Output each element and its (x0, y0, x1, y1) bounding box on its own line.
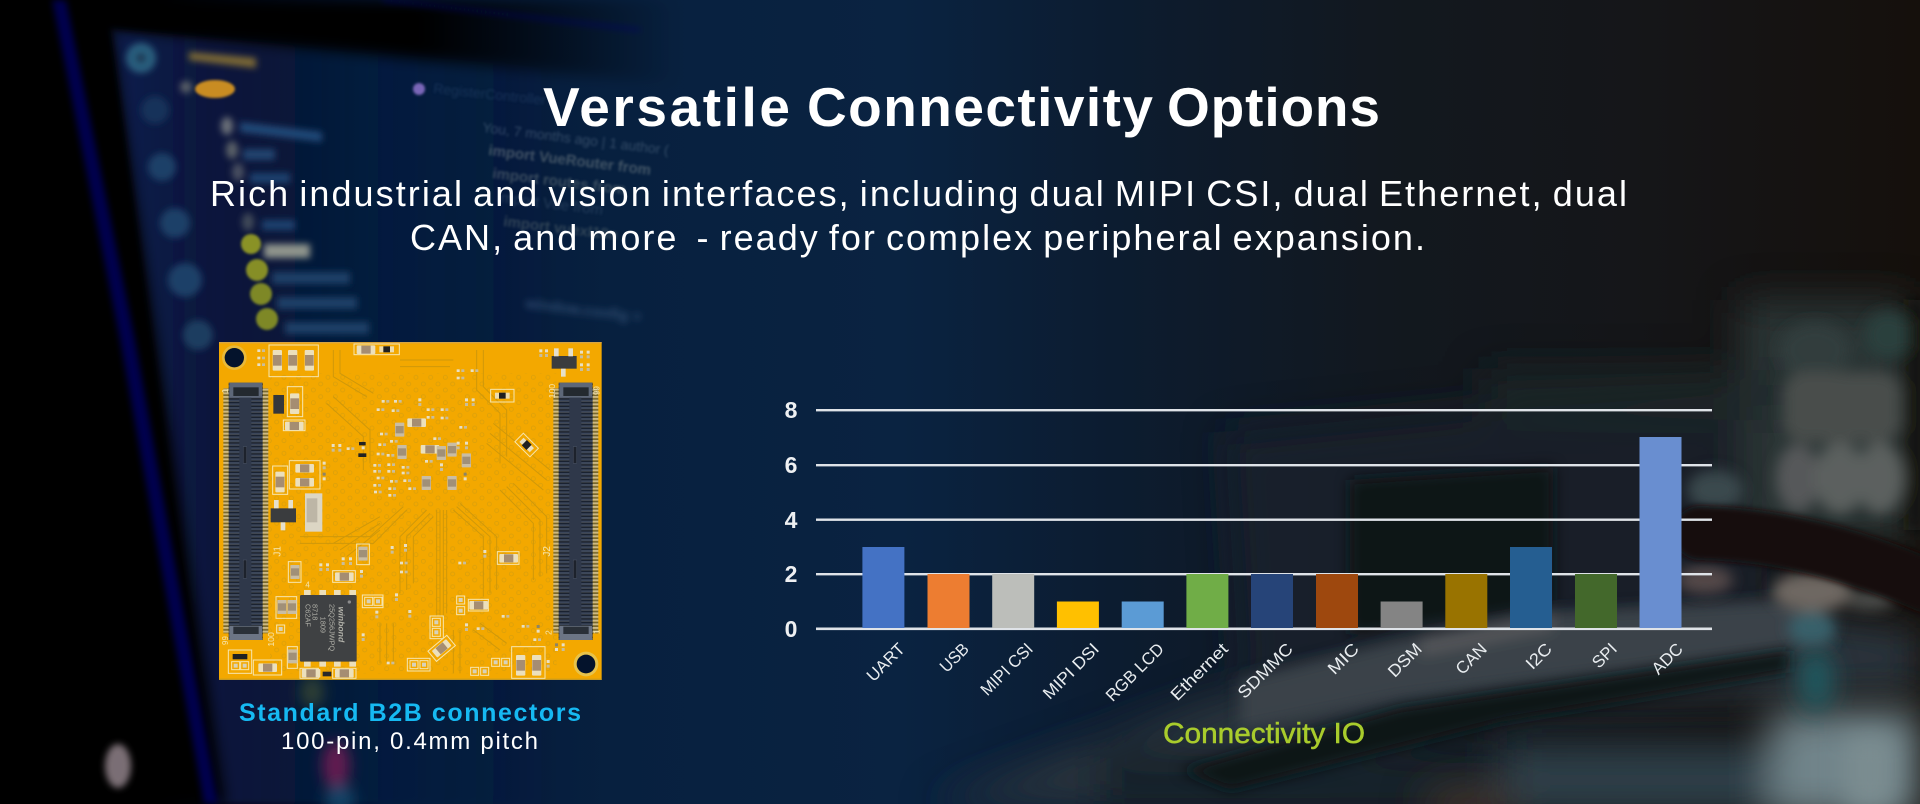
silkscreen labels: J2 (542, 546, 553, 557)
title: Connectivity (807, 76, 1153, 138)
subtitle: Rich industrial and vision interfaces, including dual MIPI CSI, dual Ethernet, dual (210, 173, 1627, 214)
x axis labels: USB (936, 639, 973, 676)
silkscreen labels: 4 (305, 580, 310, 589)
silkscreen labels (220, 384, 601, 647)
flash memory chip: 25Q256JWPQ (327, 604, 336, 652)
bar chart: Connectivity IO (785, 397, 1712, 750)
bars (862, 437, 1682, 628)
flash memory chip: 8718 (311, 604, 320, 620)
panel: PCB photo (219, 342, 602, 680)
silkscreen labels: 1 (220, 388, 230, 393)
y axis labels: 0 (785, 616, 797, 642)
x axis labels (863, 639, 1687, 705)
silkscreen labels: 99 (592, 386, 601, 395)
background photo: blurred monitor and equipment: window.config = (524, 295, 642, 326)
flash memory chip (300, 590, 357, 667)
x axis labels: MIPI CSI (977, 639, 1037, 699)
silkscreen labels: 2 (544, 630, 554, 635)
silkscreen labels: 100 (547, 384, 557, 398)
x axis labels: UART (863, 639, 909, 685)
silkscreen labels: J1 (273, 546, 284, 557)
x axis labels: MIC (1324, 639, 1363, 678)
silkscreen labels: 100 (266, 632, 276, 647)
caption: connector detail: 100-pin, 0.4mm pitch (281, 728, 538, 755)
subtitle: CAN, and more - ready for complex peripheral expansion. (410, 217, 1425, 258)
x axis labels: MIPI DSI (1039, 639, 1103, 703)
mounting holes (222, 345, 598, 676)
background photo: blurred monitor and equipment: You, 7 months ago | 1 author ( (482, 119, 670, 158)
title: Options (1167, 76, 1380, 138)
silkscreen labels: 1 (592, 629, 601, 634)
y axis labels: 4 (785, 507, 798, 533)
background photo: blurred monitor and equipment: import vuexI18n (503, 213, 619, 244)
x axis labels: CAN (1452, 639, 1491, 678)
x axis labels: I2C (1522, 639, 1556, 673)
title (543, 76, 1380, 138)
x axis labels: DSM (1384, 639, 1426, 681)
flash memory chip: 1809 (319, 617, 328, 633)
B2B connector J2 (553, 383, 598, 640)
x axis labels: RGB LCD (1102, 639, 1168, 705)
surface components (232, 345, 590, 678)
silkscreen labels: 99 (221, 636, 230, 645)
background photo: blurred monitor and equipment: import Vue from (497, 189, 604, 219)
x axis labels: ADC (1648, 639, 1687, 678)
chart title: Connectivity IO (1163, 718, 1365, 750)
caption: connector heading: Standard B2B connectors (239, 699, 581, 727)
y axis labels: 8 (785, 397, 798, 423)
x axis labels: Ethernet (1167, 639, 1232, 704)
background photo: blurred monitor and equipment: RegisterController (433, 80, 547, 108)
x axis labels: SPI (1588, 639, 1621, 672)
background photo: blurred monitor and equipment: import VueRouter from (488, 142, 652, 179)
y axis labels: 2 (785, 561, 797, 587)
flash memory chip: C62AF (303, 604, 312, 627)
B2B connector J1 (223, 383, 268, 640)
subtitle (210, 173, 1627, 258)
y axis labels: 6 (785, 452, 797, 478)
y axis labels (785, 397, 798, 642)
flash memory chip: winbond (337, 607, 347, 643)
background photo: blurred monitor and equipment: import routes from (492, 165, 627, 198)
title: Versatile (543, 76, 790, 138)
x axis labels: SDMMC (1234, 639, 1297, 702)
